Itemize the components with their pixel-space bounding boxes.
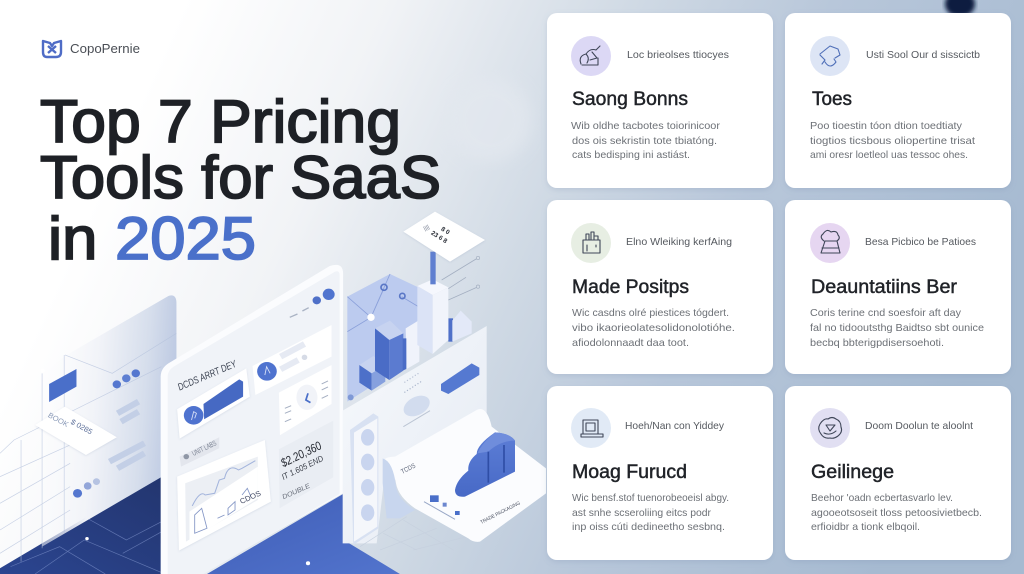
panel: card 2 [785,13,1011,188]
shelf controls [348,363,479,427]
floating sign: 8 0 [440,226,451,237]
back panel widgets [73,369,145,498]
panel: card 2: Toes [812,89,852,110]
card text [572,307,735,349]
logo wordmark: CopoPernie [70,41,140,56]
title: Top 7 Pricing [40,88,401,155]
card text: agooeotsoseit tloss petoosivietbecb. [811,507,982,519]
bar: small blue cube [359,356,385,391]
chart lines [347,274,418,332]
isometric illustration: left and centre [0,265,400,574]
panel: card 5: Moag Furucd [572,462,687,483]
back white block [448,311,472,342]
card: price stat: DOUBLE [281,483,312,501]
left grid [0,333,176,562]
card text: cats bedisping ini astiást. [572,149,690,161]
panel heading: DCDS ARRT DEY [176,359,239,393]
panel: card 6 [785,386,1011,560]
title: Tools for SaaS [40,144,441,211]
decorative sphere [448,78,532,162]
card text: Coris terine cnd soesfoir aft day [810,307,962,319]
card: price stat: IT 1.605 END [280,453,325,482]
paper tray with cloud: TCDS [400,462,417,476]
card text: Beehor 'oadn ecbertasvarlo lev. [811,492,953,504]
panel: card 4 [785,200,1011,374]
card text: fal no tidooutsthg Baidtso sbt ounice [810,322,984,334]
card: price stat [278,421,333,508]
card text [811,492,982,533]
logo [43,41,140,57]
shelf controls: • • • • • • [403,371,421,386]
card text: ast snhe scseroliing eitcs podr [572,507,711,519]
label pill: UNIT LABS [190,439,218,458]
card text: becbq bbterigpdisersoehoti. [810,337,944,349]
label pill [180,437,219,467]
floating white ticket [35,407,117,455]
cloud [455,432,515,497]
panel: card 1: Loc brieolses ttiocyes [627,49,729,61]
floating sign: 23 6 8 [430,230,449,245]
card: line chart [177,440,271,551]
card text: afiodolonnaadt daa toot. [572,337,689,349]
floating sign [403,212,485,262]
paper tray with cloud [383,409,546,542]
panel: card 5: Hoeh/Nan con Yiddey [625,420,725,432]
panel: card 1: Saong Bonns [572,89,688,110]
blue floor [207,494,400,574]
back panel [42,295,176,547]
card text: erfioidbr a tionk elbqoil. [811,521,920,533]
panel: card 4: Besa Picbico be Patioes [865,236,976,248]
shelf controls: • • • • • • • [403,379,424,396]
card text: vibo ikaorieolatesolidonolotióhe. [572,322,735,334]
card: blue action [177,368,250,439]
card text: dos ois sekristin tote tbiatóng. [572,135,717,147]
panel: card 2: Usti Sool Our d sisscictb [866,49,980,61]
card: price stat: $2.20,360 [278,439,324,470]
icon: logo shield [43,41,61,57]
floor grid [360,517,467,550]
translucent chart backdrop [347,274,418,402]
panel: card 3 [547,200,773,374]
card: line chart: CDOS [238,489,262,506]
dark blob behind cards [945,0,975,17]
floor circuit lines [11,517,165,574]
card text [571,120,721,161]
icon: house outline [810,36,850,76]
card text: ami oresr loetleol uas tessoc ohes. [810,149,968,161]
panel: card 3: Made Positps [572,277,689,298]
shelf base [343,326,487,543]
card text: tiogtios ticsbous oliopertine trisat [810,135,975,147]
floor sparkles [41,369,310,565]
paper tray with cloud: TRADE PACKAGING [480,500,522,526]
main dashboard panel [161,265,343,574]
card text [810,120,975,161]
panel: card 5 [547,386,773,560]
bar: white [403,320,419,371]
panel: card 1 [547,13,773,188]
card: profile row [253,325,332,395]
card text [572,492,729,533]
floating sign: |||| [423,224,431,232]
card text: Poo tioestin tóon dtion toedtiaty [810,120,963,132]
icon: toolbox [571,223,611,263]
blue tag [49,369,76,402]
icon: chef hat [810,223,850,263]
panel: card 3: Elno Wleiking kerfAing [626,236,732,248]
panel: card 6: Doom Doolun te aloolnt [865,420,973,432]
floating white ticket: $ 0285 [69,417,94,436]
card text: Wic casdns olré piestices tógdert. [572,307,729,319]
title [40,88,441,272]
card text: Wib oldhe tacbotes toiorinicoor [571,120,721,132]
icon: tool tag [571,36,611,76]
isometric illustration: chart tower and tray [343,212,546,550]
panel: card 4: Deauntatiins Ber [811,277,958,298]
icon: smiling face badge [810,408,850,448]
panel: card 6: Geilinege [811,462,894,483]
navy floor [0,471,182,574]
icon: laptop [571,408,611,448]
panel header dots [290,289,335,317]
floating white ticket: BOOK [46,411,70,429]
callout lines [442,256,480,300]
title: in 2025 [48,205,256,272]
side button rail [350,413,378,545]
card: small metric [279,365,332,435]
bar: tall blue [375,321,403,380]
card text: Wic bensf.stof tuenorobeoeisl abgy. [572,492,729,504]
card text: inp oiss cúti dedineetho sesbnq. [572,521,725,533]
bar: tall white column with stem [417,252,448,354]
card text [810,307,984,349]
